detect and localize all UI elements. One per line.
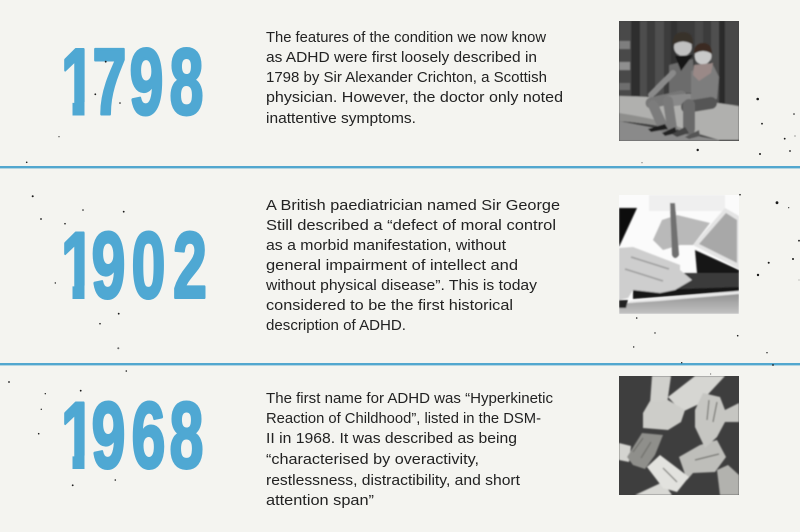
text block: 1798 description: The features of the condition we now know — [266, 29, 546, 46]
divider line: first — [0, 166, 800, 168]
text block: 1798 description: 1798 by Sir Alexander Crichton, a Scottish — [266, 69, 547, 86]
text block: 1902 description: description of ADHD. — [266, 317, 406, 334]
ground — [619, 121, 719, 141]
text block: 1798 description: as ADHD were first loosely described in — [266, 49, 537, 66]
text block: 1968 description: The first name for ADHD was “Hyperkinetic — [266, 390, 553, 407]
text block: 1902 description: without physical disease”. This is today — [265, 277, 538, 294]
binder and desk edge — [633, 250, 739, 299]
text block: 1968 description — [266, 390, 553, 509]
text block: 1902 description: as a morbid manifestation, without — [266, 237, 507, 254]
shorter boy — [672, 43, 719, 139]
pen — [670, 203, 679, 258]
panel: 1902 — [61, 195, 739, 334]
photo: ring of linked hands — [619, 376, 739, 495]
text block: 1798 description: physician. However, the doctor only noted — [266, 89, 563, 106]
divider line: second — [0, 363, 800, 365]
upper hand — [653, 215, 710, 250]
year digit: 1: 1 — [61, 29, 95, 134]
decorative speckles — [8, 61, 800, 486]
text block: 1902 description: general impairment of intellect and — [266, 257, 518, 274]
table — [619, 291, 739, 314]
text block: 1968 description: II in 1968. It was described as being — [266, 430, 517, 447]
log — [619, 96, 739, 140]
panel: 1968 — [61, 376, 739, 509]
text block: 1968 description: restlessness, distractibility, and short — [266, 472, 521, 489]
photo: two boys sitting on a log — [619, 21, 739, 141]
text block: 1902 description: Still described a “defect of moral control — [266, 217, 556, 234]
text block: 1968 description: attention span” — [266, 492, 374, 509]
taller boy — [648, 32, 695, 136]
text block: 1902 description: considered to be the first historical — [266, 297, 513, 314]
text block: 1968 description: “characterised by overactivity, — [266, 451, 479, 468]
text block: 1902 description — [265, 197, 560, 334]
text block: 1968 description: Reaction of Childhood”, listed in the DSM- — [266, 410, 541, 427]
year digit: 1: 1 — [61, 382, 95, 488]
photo: hands over documents — [619, 195, 739, 314]
text block: 1798 description — [266, 29, 563, 127]
panel: 1798 — [61, 21, 739, 141]
year digit: 1: 1 — [61, 212, 95, 318]
text block: 1798 description: inattentive symptoms. — [266, 110, 416, 127]
document — [693, 208, 739, 269]
text block: 1902 description: A British paediatrician named Sir George — [266, 197, 560, 214]
lower hand — [619, 247, 692, 300]
